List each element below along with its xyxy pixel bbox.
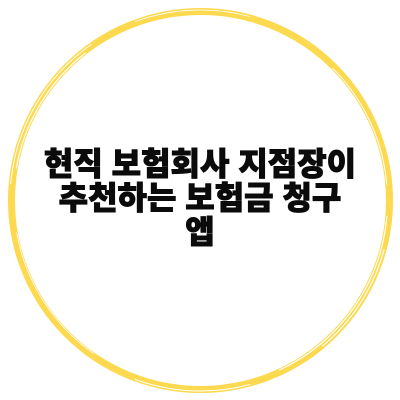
- title: 현직 보험회사 지점장이: [44, 146, 356, 182]
- title: 앱: [185, 214, 215, 250]
- title: 추천하는 보험금 청구: [59, 180, 341, 216]
- title: [44, 146, 356, 250]
